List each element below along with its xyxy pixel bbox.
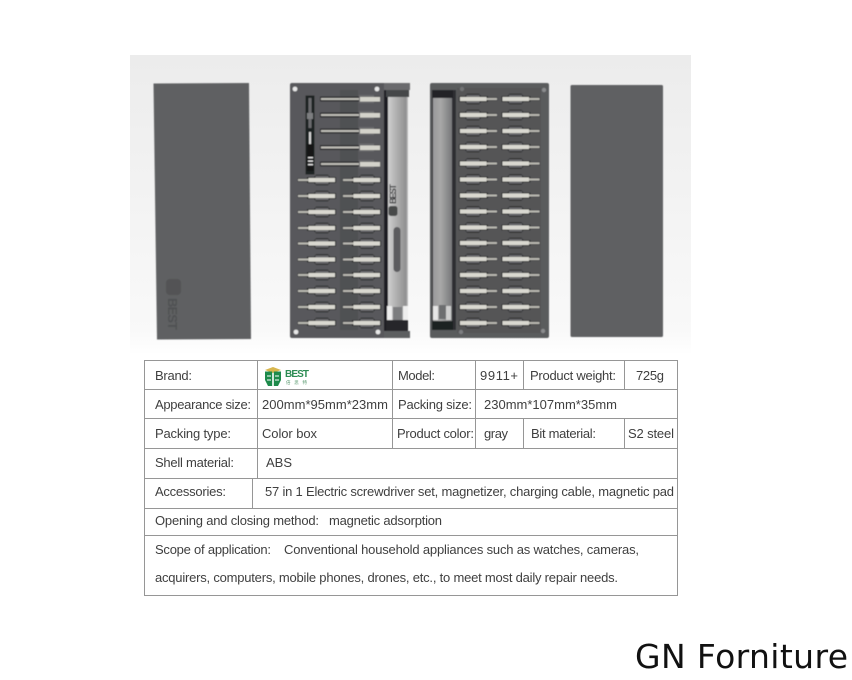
row: packing, color, bit material: Bit material: (531, 426, 596, 441)
row: sizes: Packing size: (398, 397, 472, 412)
lid logo (165, 279, 181, 330)
row: packing, color, bit material: Color box (262, 426, 318, 441)
photo background (130, 55, 691, 355)
lid logo: BEST (165, 298, 180, 330)
table grid (144, 360, 678, 596)
row: shell material: Shell material: (155, 455, 234, 470)
row: opening and closing method (155, 513, 442, 528)
handle logo (388, 184, 398, 216)
electric screwdriver (384, 83, 410, 338)
row: accessories: Accessories: (155, 484, 226, 499)
row: sizes: Appearance size: (155, 397, 251, 412)
handle logo: BEST (388, 184, 398, 204)
row: packing, color, bit material: Packing type: (155, 426, 231, 441)
bits: right column (502, 94, 540, 328)
row: shell material: ABS (266, 455, 292, 470)
row: brand, model, weight: 725g (636, 368, 664, 383)
row: brand, model, weight (155, 367, 664, 386)
row: brand, model, weight: Product weight: (530, 368, 616, 383)
bits: right column (342, 175, 381, 328)
row: accessories: 57 in 1 Electric screwdriver set, magnetizer, charging cable, magnetic pad (265, 484, 674, 499)
left lid (154, 83, 251, 340)
row: sizes: 200mm*95mm*23mm (262, 397, 388, 412)
bits: left column (459, 94, 498, 328)
row: sizes (155, 397, 617, 412)
open cylinder holder (432, 90, 456, 330)
row: brand, model, weight: Model: (398, 368, 435, 383)
brand logo: BEST (285, 369, 309, 380)
row: opening and closing method: magnetic adsorption (329, 513, 442, 528)
row: shell material (155, 455, 292, 470)
row: opening and closing method: Opening and closing method: (155, 513, 319, 528)
left tray with bits (290, 83, 386, 338)
row: packing, color, bit material: S2 steel (628, 426, 674, 441)
row: packing, color, bit material: gray (484, 426, 508, 441)
brand logo: 倍思特 (286, 379, 308, 386)
right lid (570, 85, 663, 337)
long bits: top rows (320, 95, 380, 168)
product photo: open screwdriver case (154, 83, 663, 340)
brand logo (265, 367, 309, 386)
right tray with bits (430, 83, 549, 338)
watermark: GN Forniture (635, 637, 848, 676)
specification table (144, 360, 678, 596)
row: scope of application: Scope of application: (155, 542, 271, 557)
row: scope of application: Conventional household appliances such as watches, cameras, (284, 542, 639, 557)
row: scope of application (155, 542, 639, 585)
magnetizer holder (306, 96, 314, 174)
row: sizes: 230mm*107mm*35mm (484, 397, 617, 412)
row: packing, color, bit material (155, 426, 674, 441)
row: brand, model, weight: 9911+ (480, 368, 518, 383)
bits: left column (298, 175, 336, 328)
row: scope of application: acquirers, computers, mobile phones, drones, etc., to meet most daily repair needs. (155, 570, 618, 585)
row: packing, color, bit material: Product color: (397, 426, 474, 441)
row: brand, model, weight: Brand: (155, 368, 192, 383)
